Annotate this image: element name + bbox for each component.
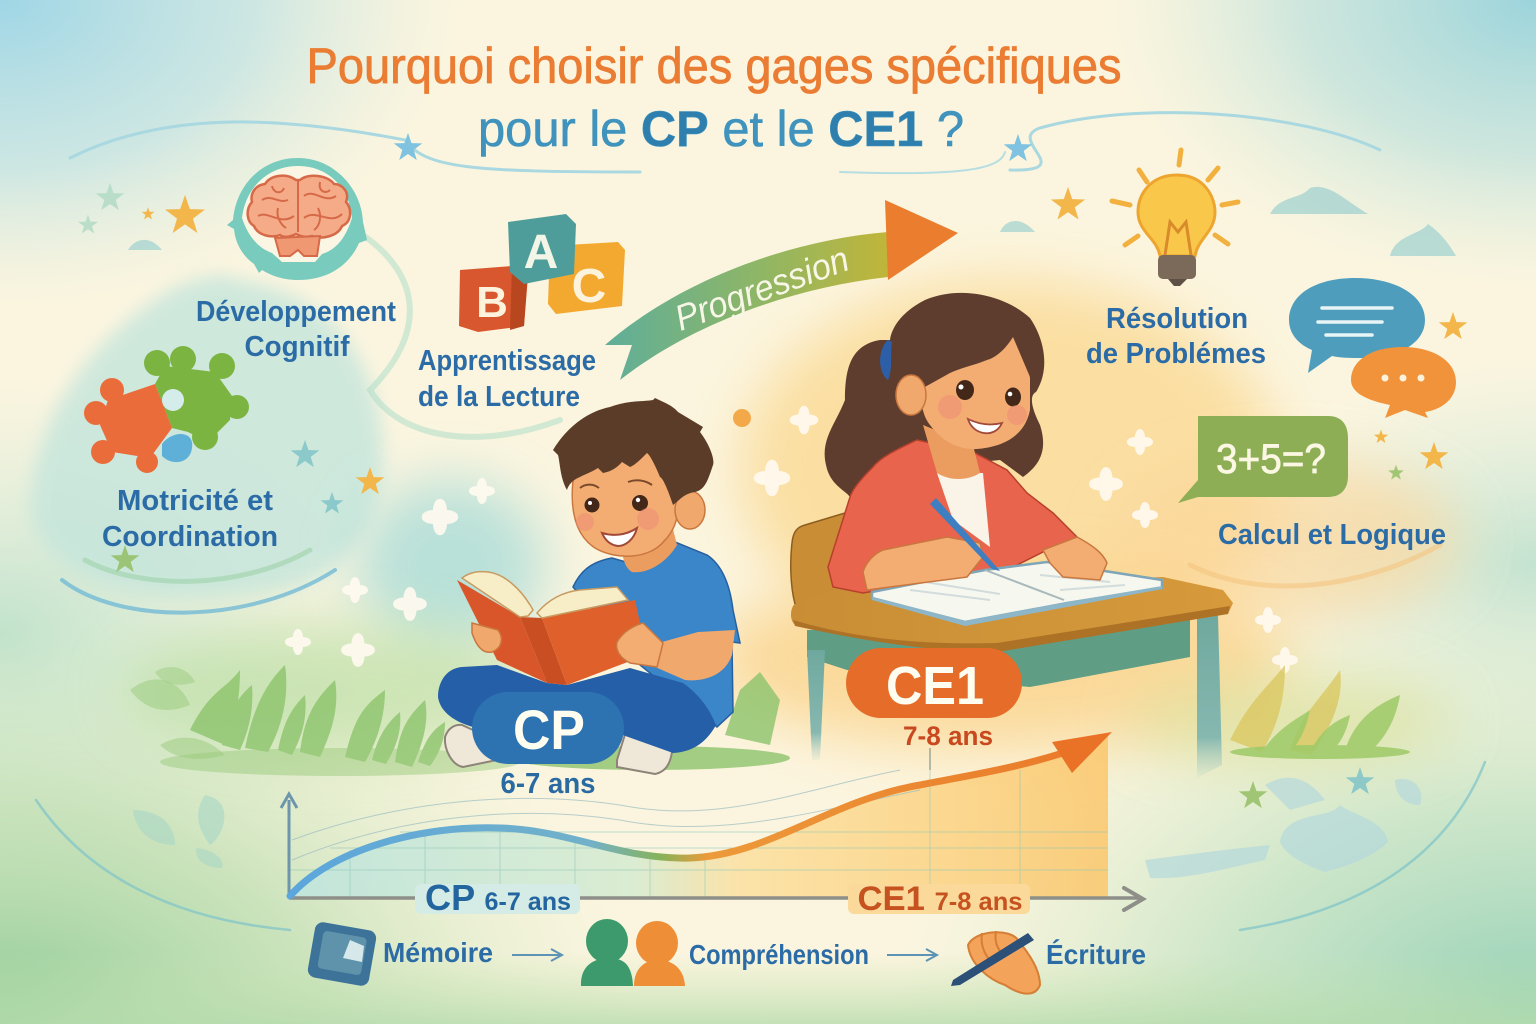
- callout: math problem: 3+5=?: [1216, 435, 1326, 482]
- title stars: [394, 133, 1032, 161]
- desk legs: [807, 650, 825, 760]
- chart: progression curve: [281, 732, 1143, 910]
- icon: alphabet blocks: [459, 214, 625, 332]
- text: motricité et coordination: Coordination: [102, 521, 278, 553]
- text: résolution de problèmes: [1086, 303, 1266, 370]
- face features: [584, 498, 600, 512]
- face: [922, 337, 1030, 449]
- badge: CE1: CE1: [886, 656, 984, 716]
- title: pour le CP et le CE1 ?: [478, 101, 964, 157]
- text: motricité et coordination: Motricité et: [117, 485, 273, 517]
- shirt: [937, 473, 990, 547]
- arrow: progression: Progression: [669, 238, 854, 339]
- jacket: [828, 440, 1077, 593]
- icon: light bulb: [1112, 150, 1238, 286]
- text: calcul et logique: Calcul et Logique: [1218, 519, 1446, 551]
- label: CE1 age: 7-8 ans: [903, 721, 993, 751]
- hands: [863, 537, 983, 590]
- decorative swirl lines: [36, 113, 1485, 930]
- ear: [896, 375, 926, 415]
- text: développement cognitif: Cognitif: [244, 331, 350, 363]
- label: chart CP: CP 6-7 ans: [425, 877, 571, 918]
- book pages: [462, 572, 533, 617]
- neck: [923, 425, 980, 479]
- book cover: [457, 580, 642, 685]
- illustration: boy reading: [438, 398, 740, 774]
- arrow: compréhension to écriture: [887, 949, 937, 961]
- title: Pourquoi choisir des gages spécifiques: [306, 38, 1122, 94]
- text: mémoire: Mémoire: [383, 937, 493, 968]
- clouds and leaves: [128, 187, 1456, 878]
- arrow: progression: [605, 200, 958, 380]
- icon: alphabet blocks: B: [476, 278, 508, 327]
- bangs: [890, 299, 1040, 388]
- icon: puzzle pieces: [84, 346, 249, 473]
- icon: speech bubbles: [1289, 278, 1456, 418]
- icon: two people: [581, 919, 685, 986]
- hair back: [825, 293, 1044, 497]
- illustration: girl writing at desk: [791, 293, 1233, 778]
- desk top: [791, 577, 1233, 650]
- hair tie: [880, 340, 892, 380]
- text: motricité et coordination: [102, 485, 278, 553]
- notebook: [872, 562, 1162, 622]
- badge: CE1: [846, 648, 1022, 718]
- text: apprentissage de la lecture: de la Lecture: [418, 381, 580, 413]
- label: chart CE1: CE1 7-8 ans: [858, 880, 1023, 918]
- icon: memory tablet: [307, 921, 377, 987]
- badge: CP: [472, 692, 624, 764]
- text: apprentissage de la lecture: [418, 345, 596, 413]
- text: développement cognitif: [196, 296, 396, 363]
- neck: [622, 525, 677, 572]
- text: apprentissage de la lecture: Apprentissage: [418, 345, 596, 377]
- arm: [655, 630, 735, 680]
- face features: [956, 380, 974, 400]
- icon: brain in speech bubble: [227, 158, 367, 280]
- label: CP age: 6-7 ans: [500, 768, 596, 800]
- pencil: [930, 498, 1000, 571]
- badge: CP: CP: [513, 698, 585, 761]
- desk underside: [807, 620, 1190, 687]
- text: résolution de problèmes: Résolution: [1106, 303, 1248, 335]
- axis: [281, 794, 297, 898]
- legs: [438, 665, 716, 753]
- head: [572, 440, 679, 556]
- icon: hand writing: [951, 931, 1040, 994]
- decorative stars: [78, 183, 1467, 808]
- icon: alphabet blocks: C: [572, 260, 606, 313]
- shirt: [573, 542, 740, 727]
- grass: [130, 665, 1410, 776]
- text: résolution de problèmes: de Problémes: [1086, 338, 1266, 370]
- shoes: [445, 725, 497, 767]
- callout: math problem: [1178, 416, 1348, 503]
- text: écriture: Écriture: [1046, 939, 1146, 970]
- text: compréhension: Compréhension: [689, 939, 869, 970]
- hands: [472, 623, 501, 652]
- title: [306, 38, 1122, 157]
- text: développement cognitif: Développement: [196, 296, 396, 328]
- hair: [553, 398, 713, 505]
- icon: alphabet blocks: A: [524, 226, 558, 279]
- chair: [791, 513, 860, 604]
- arrow: mémoire to compréhension: [512, 949, 562, 961]
